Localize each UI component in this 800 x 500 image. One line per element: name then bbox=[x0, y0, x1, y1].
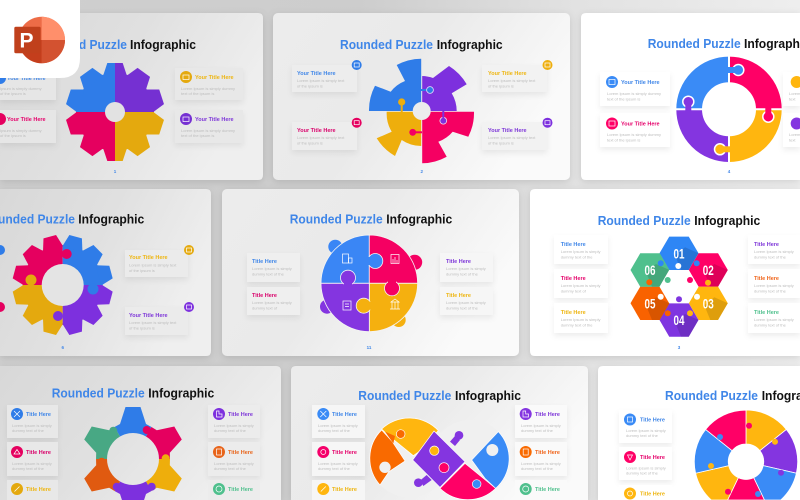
text box: purple: dummy text of the bbox=[754, 254, 787, 260]
hexagon 03: 03 bbox=[703, 295, 714, 311]
title: hexagon slide: Rounded Puzzle bbox=[598, 214, 691, 228]
text box: blue: Ipsum is simply dummy bbox=[0, 86, 42, 91]
icon: document bbox=[343, 301, 351, 310]
text box: green: dummy text of the bbox=[754, 322, 787, 328]
hexagon 06: 06 bbox=[644, 262, 656, 278]
text box: purple bbox=[175, 110, 243, 143]
text box: pink bbox=[312, 442, 365, 476]
text box: pink bbox=[0, 110, 56, 143]
text box: blue bbox=[600, 72, 670, 106]
text box: orange: Title Here bbox=[754, 276, 779, 282]
text box: blue: dummy text of the bbox=[12, 428, 45, 433]
chart: ring gear puzzle bbox=[12, 234, 114, 336]
title: hexagon slide: Infographic bbox=[694, 214, 760, 228]
icon: PowerPoint logo tile bbox=[0, 0, 80, 78]
text box: gold: Lorem Ipsum is simply bbox=[561, 317, 600, 322]
text box: green bbox=[748, 303, 800, 333]
panel: donut slide bbox=[581, 13, 800, 180]
text box: gold bbox=[619, 485, 672, 500]
panel: six segment gear slide bbox=[0, 366, 281, 500]
text box: purple bbox=[125, 302, 194, 335]
text box: gold bbox=[783, 72, 800, 106]
title: round puzzle slide: Rounded Puzzle bbox=[290, 213, 383, 227]
text box: pink bbox=[600, 113, 670, 147]
text box: blue bbox=[7, 405, 58, 438]
text box: purple: Lorem Ipsum is simply text bbox=[488, 135, 536, 140]
text box: blue: Lorem Ipsum is simply text bbox=[297, 78, 345, 83]
text box: green bbox=[515, 480, 567, 500]
text box: pink: dummy text of bbox=[561, 288, 587, 294]
chart: six hexagons bbox=[630, 237, 728, 337]
text box: gold bbox=[7, 480, 58, 500]
text box: pink: Title Here bbox=[252, 293, 277, 299]
text box: pink: Lorem Ipsum is simply bbox=[252, 300, 292, 305]
text box: pink: of the ipsum is bbox=[0, 133, 26, 138]
text box: pink: text of the ipsum is bbox=[607, 138, 640, 142]
text box: gold: Lorem Ipsum is simply text bbox=[129, 262, 177, 268]
hexagon 04: 04 bbox=[674, 312, 685, 328]
title: gear slide: Rounded Puzzle bbox=[34, 38, 127, 52]
page number: 6 bbox=[61, 345, 64, 350]
text box: blue bbox=[312, 405, 365, 438]
text box: pink: Lorem Ipsum is simply bbox=[318, 461, 358, 466]
text box: pink: Ipsum is simply dummy bbox=[0, 128, 42, 133]
title: gear slide bbox=[34, 38, 196, 52]
text box: blue: Lorem Ipsum is simply bbox=[252, 266, 292, 271]
text box: gold: Title Here bbox=[446, 293, 471, 299]
chart: six segment gear bbox=[79, 407, 187, 500]
title: infinity puzzle slide: Rounded Puzzle bbox=[358, 389, 451, 403]
text box: pink: Title Here bbox=[26, 450, 51, 456]
title: donut slide: Rounded Puzzle bbox=[648, 37, 741, 51]
text box: orange bbox=[515, 442, 567, 476]
text box: green bbox=[208, 480, 260, 500]
title: pinwheel slide bbox=[340, 38, 503, 52]
text box: pink: Your Title Here bbox=[297, 128, 336, 134]
text box: purple: Title Here bbox=[446, 259, 471, 265]
text box: blue bbox=[292, 60, 362, 92]
panel: infinity puzzle slide bbox=[291, 366, 588, 500]
text box: blue: dummy text of the bbox=[318, 428, 351, 433]
text box: blue: text of the ipsum is bbox=[607, 96, 640, 102]
icon: building bbox=[342, 254, 352, 263]
text box: gold bbox=[125, 245, 194, 277]
text box: gold: text bbox=[789, 96, 796, 102]
text box: purple bbox=[208, 405, 260, 438]
page number: 3 bbox=[678, 345, 681, 350]
text box: pink: dummy text of the bbox=[12, 466, 45, 471]
text box: pink bbox=[247, 287, 300, 315]
text box: blue: dummy text of the bbox=[561, 254, 593, 260]
text box: gold: text of the ipsum is bbox=[181, 91, 214, 96]
page number: 11 bbox=[367, 345, 372, 350]
text box: gold: of the ipsum is bbox=[129, 268, 155, 273]
text box: orange: Title Here bbox=[228, 450, 253, 456]
text box: gold bbox=[440, 287, 493, 315]
text box: purple: Lorem Ipsum is simply bbox=[446, 266, 486, 271]
chart: infinity puzzle bbox=[369, 417, 509, 500]
title: pinwheel slide: Infographic bbox=[437, 38, 503, 52]
text box: blue: Title Here bbox=[26, 412, 51, 418]
text box: purple bbox=[783, 113, 800, 147]
text box: gold bbox=[554, 303, 608, 333]
text box: gold: Lorem Ipsum is simply text bbox=[488, 78, 536, 83]
chart: round puzzle bbox=[320, 235, 422, 332]
hexagon 05: 05 bbox=[644, 295, 656, 311]
title: round puzzle slide: Infographic bbox=[386, 213, 452, 227]
text box: orange: Lorem Ipsum is simply bbox=[214, 461, 254, 466]
text box: blue: Your Title Here bbox=[7, 76, 46, 82]
text box: gold: Title Here bbox=[332, 487, 357, 493]
text box: gold: Title Here bbox=[26, 487, 51, 493]
title: ring gear slide bbox=[0, 213, 144, 227]
icon: left bottom marker bbox=[0, 302, 5, 312]
text box: purple: Lorem Ipsum is simply bbox=[521, 423, 561, 428]
text box: pink bbox=[7, 442, 58, 476]
text box: gold: Lorem Ipsum is simply bbox=[446, 300, 486, 305]
text box: purple: of the ipsum is bbox=[488, 140, 514, 146]
text box: green: Title Here bbox=[535, 487, 560, 493]
text box: orange bbox=[208, 442, 260, 476]
text box: purple: text bbox=[789, 138, 796, 142]
icon: PowerPoint logo tile: P bbox=[20, 30, 34, 52]
hexagon 01: 01 bbox=[674, 245, 685, 261]
text box: pink: Your Title Here bbox=[7, 117, 46, 123]
chart: seven segment wheel bbox=[687, 398, 800, 500]
text box: gold bbox=[482, 60, 552, 92]
text box: purple: Title Here bbox=[535, 412, 560, 418]
page number: 2 bbox=[420, 169, 423, 174]
text box: pink: Lorem Ipsum is simply bbox=[12, 461, 52, 466]
text box: blue: Title Here bbox=[332, 412, 357, 418]
title: pinwheel slide: Rounded Puzzle bbox=[340, 38, 433, 52]
text box: gold: dummy text of the bbox=[561, 322, 593, 328]
text box: green: Title Here bbox=[754, 310, 779, 316]
text box: purple: dummy text of the bbox=[521, 428, 554, 433]
text box: blue: Lorem Ipsum is simply bbox=[12, 423, 52, 428]
text box: purple: Title Here bbox=[754, 242, 779, 248]
title: six segment gear slide bbox=[52, 386, 214, 400]
text box: blue: Title Here bbox=[252, 259, 277, 265]
text box: orange: dummy text of the bbox=[754, 288, 787, 294]
text box: gold bbox=[312, 480, 365, 500]
title: wheel slide: Rounded Puzzle bbox=[665, 389, 758, 403]
text box: purple: Title Here bbox=[228, 412, 253, 418]
text box: pink: of the ipsum is bbox=[297, 140, 323, 146]
title: donut slide bbox=[648, 37, 800, 51]
text box: gold: Title Here bbox=[640, 492, 665, 498]
centre puzzle hole bbox=[660, 270, 698, 303]
text box: pink bbox=[292, 118, 362, 150]
title: six segment gear slide: Infographic bbox=[148, 386, 214, 400]
text box: purple: Your Title Here bbox=[488, 128, 527, 134]
title: hexagon slide bbox=[598, 214, 760, 228]
text box: green: Title Here bbox=[228, 487, 253, 493]
text box: purple: dummy text of the bbox=[446, 272, 479, 276]
text box: blue: Lorem Ipsum is simply dummy bbox=[607, 91, 661, 96]
hexagon 02: 02 bbox=[703, 262, 714, 278]
text box: gold: Title Here bbox=[561, 310, 586, 316]
text box: gold bbox=[175, 68, 243, 100]
text box: gold: Lorem Ipsum is simply dummy bbox=[181, 86, 235, 91]
text box: orange: Lorem Ipsum is simply bbox=[754, 283, 794, 288]
text box: purple bbox=[748, 235, 800, 264]
text box: purple: Lorem Ipsum is simply bbox=[754, 249, 794, 254]
text box: purple: Lorem Ipsum is simply text bbox=[129, 320, 177, 325]
text box: blue: Your Title Here bbox=[297, 71, 336, 77]
text box: orange: dummy text of the bbox=[521, 466, 554, 471]
text box: purple bbox=[482, 118, 552, 150]
text box: purple: text of the ipsum is bbox=[181, 133, 214, 138]
text box: purple bbox=[515, 405, 567, 438]
text box: blue: of the ipsum is bbox=[297, 84, 323, 88]
text box: purple: Lorem Ipsum is simply bbox=[214, 423, 254, 428]
text box: pink: Lorem Ipsum is simply bbox=[561, 283, 600, 288]
text box: gold: Your Title Here bbox=[129, 255, 168, 261]
text box: blue bbox=[619, 410, 672, 443]
text box: blue: of the ipsum is bbox=[0, 91, 26, 96]
title: ring gear slide: Infographic bbox=[78, 213, 144, 227]
text box: orange: Lorem Ipsum is simply bbox=[521, 461, 561, 466]
panel: wheel slide bbox=[598, 366, 800, 500]
chart: puzzle donut bbox=[676, 56, 782, 163]
text box: purple: of the ipsum is bbox=[129, 326, 155, 330]
text box: purple bbox=[440, 253, 493, 282]
text box: blue: dummy text of the bbox=[626, 433, 659, 438]
text box: blue bbox=[247, 253, 300, 282]
chart: four colour gear bbox=[65, 63, 165, 161]
text box: blue: Your Title Here bbox=[621, 80, 660, 86]
text box: blue: Lorem Ipsum is simply bbox=[561, 249, 600, 254]
text box: pink: Title Here bbox=[640, 455, 665, 461]
panel: round puzzle slide bbox=[222, 189, 519, 356]
title: gear slide: Infographic bbox=[130, 38, 196, 52]
text box: blue bbox=[0, 68, 56, 100]
text box: pink bbox=[554, 269, 608, 298]
text box: orange bbox=[748, 269, 800, 298]
text box: pink bbox=[619, 447, 672, 480]
page number: 4 bbox=[728, 169, 731, 174]
panel: ring gear slide bbox=[0, 189, 211, 356]
text box: pink: dummy text of the bbox=[318, 466, 351, 471]
text box: gold: Your Title Here bbox=[488, 71, 527, 77]
text box: pink: Title Here bbox=[561, 276, 586, 282]
text box: purple: Your Title Here bbox=[129, 313, 168, 319]
text box: pink: dummy text of the bbox=[626, 470, 659, 476]
title: infinity puzzle slide bbox=[358, 389, 521, 403]
text box: blue: Lorem Ipsum is simply bbox=[626, 428, 666, 433]
text box: gold: Your Title Here bbox=[195, 75, 234, 81]
text box: blue bbox=[554, 235, 608, 264]
text box: blue: Title Here bbox=[561, 242, 586, 248]
text box: blue: dummy text of the bbox=[252, 272, 285, 276]
text box: pink: Lorem Ipsum is simply bbox=[626, 466, 666, 470]
icon: left top marker bbox=[0, 245, 5, 255]
panel: gear slide bbox=[0, 13, 263, 180]
icon: chart bbox=[391, 254, 399, 264]
title: infinity puzzle slide: Infographic bbox=[455, 389, 521, 403]
page number: 1 bbox=[114, 169, 117, 174]
text box: pink: Lorem Ipsum is simply dummy bbox=[607, 132, 661, 137]
text box: pink: Your Title Here bbox=[621, 122, 660, 128]
text box: gold: of the ipsum is bbox=[488, 84, 514, 88]
text box: green: Lorem Ipsum is simply bbox=[754, 317, 794, 322]
title: six segment gear slide: Rounded Puzzle bbox=[52, 386, 145, 400]
text box: pink: Title Here bbox=[332, 450, 357, 456]
text box: purple: Your Title Here bbox=[195, 117, 234, 123]
text box: blue: Lorem Ipsum is simply bbox=[318, 423, 358, 428]
text box: purple: Lorem Ipsum is simply dummy bbox=[181, 128, 235, 133]
text box: orange: Title Here bbox=[535, 450, 560, 456]
text box: purple: dummy text of the bbox=[214, 428, 247, 433]
text box: pink: Lorem Ipsum is simply text bbox=[297, 135, 345, 140]
icon: bank bbox=[390, 299, 400, 309]
text box: pink: dummy text of bbox=[252, 306, 278, 310]
text box: orange: dummy text of the bbox=[214, 466, 247, 471]
panel: hexagon slide bbox=[530, 189, 800, 356]
text box: blue: Title Here bbox=[640, 418, 665, 424]
title: round puzzle slide bbox=[290, 213, 452, 227]
panel: pinwheel slide bbox=[273, 13, 570, 180]
text box: gold: dummy text of the bbox=[446, 306, 479, 310]
chart: pinwheel puzzle bbox=[369, 59, 474, 163]
